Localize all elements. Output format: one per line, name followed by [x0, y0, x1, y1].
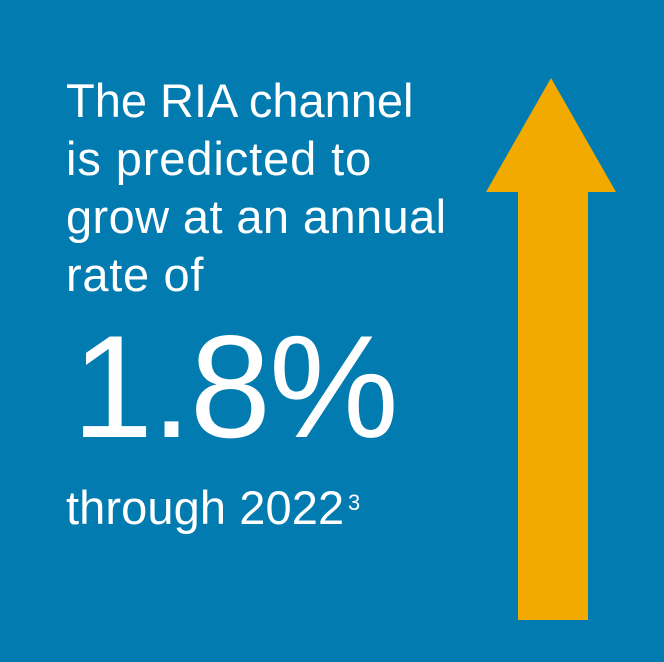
big number: 1.8%	[72, 305, 397, 468]
intro text: rate of	[66, 248, 204, 301]
intro text: The RIA channel	[66, 74, 414, 127]
intro text	[66, 74, 446, 301]
intro text: is predicted to	[66, 132, 372, 185]
panel: background: 3	[348, 490, 360, 515]
intro text: grow at an annual	[66, 190, 446, 243]
icon: upward arrow	[486, 78, 616, 620]
closing text with footnote: through 2022	[66, 481, 344, 534]
